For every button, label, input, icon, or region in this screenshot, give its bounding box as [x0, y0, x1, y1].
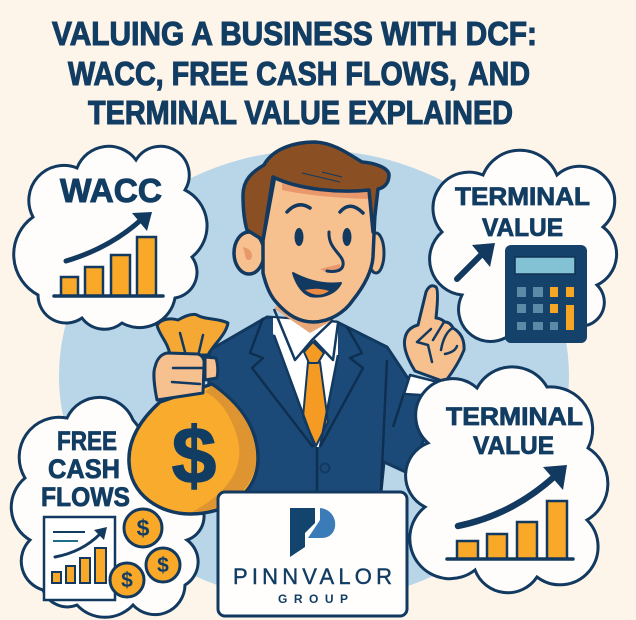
terminal value heading [455, 183, 590, 242]
panel: WACC cloud [14, 146, 207, 329]
brand name: PINNVALOR [233, 564, 392, 589]
terminal value heading: TERMINAL [455, 183, 590, 211]
icon: coins [110, 509, 180, 597]
title: VALUING A BUSINESS WITH DCF: [52, 15, 537, 52]
icon: money bag [129, 314, 258, 514]
fist [154, 353, 218, 400]
terminal value heading [446, 403, 583, 460]
icon: coins: $ [157, 554, 169, 577]
WACC bar chart [54, 212, 163, 296]
icon: up arrow [457, 243, 495, 279]
icon: report with chart [44, 517, 115, 600]
tie [303, 342, 328, 446]
brand name: GROUP [278, 592, 348, 606]
eyes [294, 228, 352, 246]
panel: terminal value cloud with calculator [430, 150, 617, 343]
shirt [273, 318, 338, 447]
panel: bottom right terminal value cloud [406, 367, 608, 593]
icon: coins: $ [121, 569, 133, 592]
brand name [233, 564, 392, 606]
background circle [59, 150, 569, 602]
free cash flows heading: CASH [48, 454, 120, 484]
jacket button [320, 464, 330, 472]
mouth [293, 273, 341, 297]
jacket [205, 317, 440, 492]
nose [320, 232, 343, 272]
panel: businessman figure [205, 142, 464, 492]
hair [243, 142, 389, 240]
terminal value heading: VALUE [473, 432, 554, 460]
icon: P logo [290, 508, 335, 557]
WACC heading: WACC [60, 172, 162, 209]
free cash flows heading: FLOWS [41, 482, 130, 512]
terminal value heading: TERMINAL [446, 403, 583, 431]
face [263, 175, 376, 322]
panel: Pinnvalor logo card [218, 492, 407, 616]
panel: free cash flows cloud [11, 397, 204, 617]
raised hand [404, 286, 464, 396]
left ear [234, 232, 264, 274]
terminal value bar chart [447, 465, 573, 559]
lapels [250, 318, 405, 492]
neck [275, 303, 345, 333]
terminal value heading: VALUE [482, 214, 563, 242]
right ear [368, 233, 384, 273]
icon: calculator [505, 245, 587, 343]
icon: coins: $ [137, 515, 150, 541]
free cash flows heading: FREE [57, 426, 117, 456]
free cash flows heading [41, 426, 130, 512]
icon: money bag: $ [172, 411, 216, 500]
brows [287, 205, 363, 213]
collar [274, 309, 338, 447]
title: WACC, FREE CASH FLOWS, [68, 55, 457, 92]
title: AND [468, 55, 530, 92]
title: TERMINAL VALUE EXPLAINED [88, 94, 513, 131]
forehead shade [282, 183, 368, 199]
title [52, 15, 537, 131]
